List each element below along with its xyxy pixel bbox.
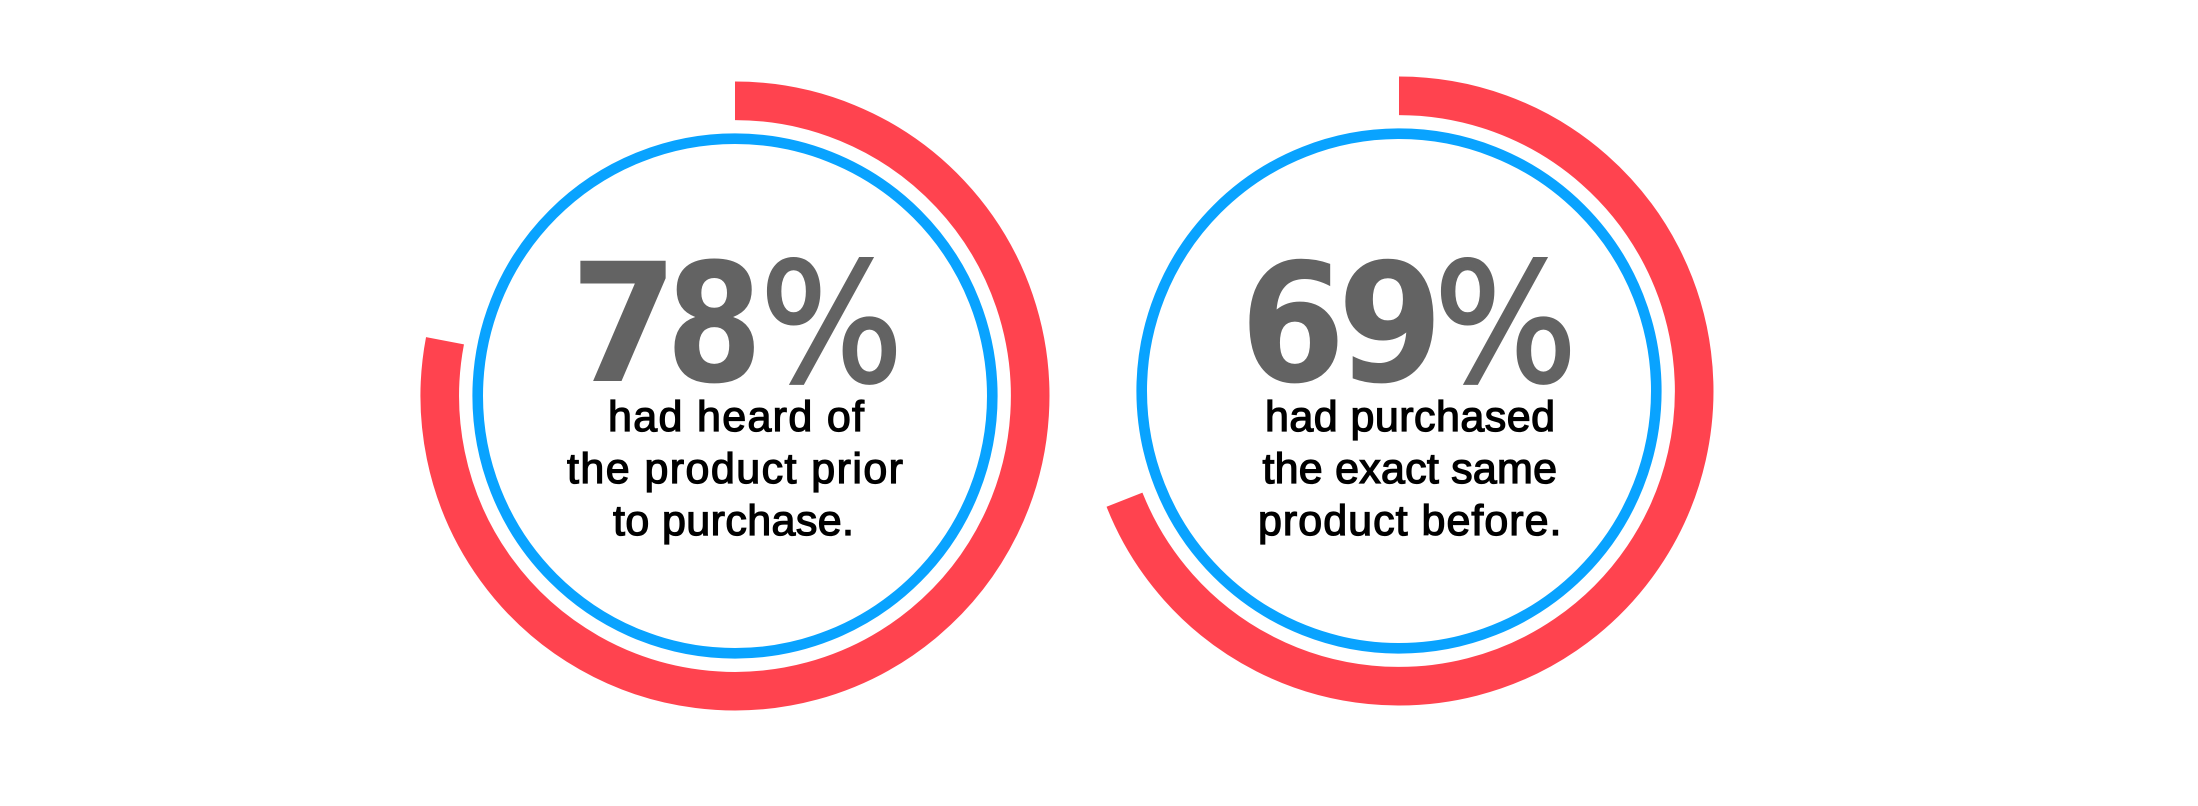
caption: 69%: had purchased: [1265, 393, 1555, 441]
panel: 69% stat: [1124, 96, 1694, 686]
big number: 69%: %: [1434, 228, 1577, 420]
big number: 78%: 7: [570, 228, 678, 420]
blue ring: [1142, 134, 1656, 648]
caption: 69%: product before.: [1258, 497, 1562, 545]
blue ring: [478, 139, 992, 653]
caption: 78%: to purchase.: [613, 497, 854, 545]
caption: 69%: the exact same: [1262, 445, 1557, 493]
red progress arc: 78%: [440, 101, 1030, 691]
red progress arc: 69%: [1124, 96, 1694, 686]
big number: 69%: [1240, 228, 1577, 420]
big number: 69%: 6: [1240, 228, 1346, 420]
caption: 78%: had heard of: [608, 393, 865, 441]
caption: 78%: [567, 393, 903, 545]
panel: 78% stat: [440, 101, 1030, 691]
caption: 78%: the product prior: [567, 445, 903, 493]
big number: 78%: %: [760, 228, 903, 420]
big number: 78%: 8: [666, 228, 762, 420]
caption: 69%: [1258, 393, 1562, 545]
big number: 78%: [570, 228, 903, 420]
big number: 69%: 9: [1338, 228, 1443, 420]
